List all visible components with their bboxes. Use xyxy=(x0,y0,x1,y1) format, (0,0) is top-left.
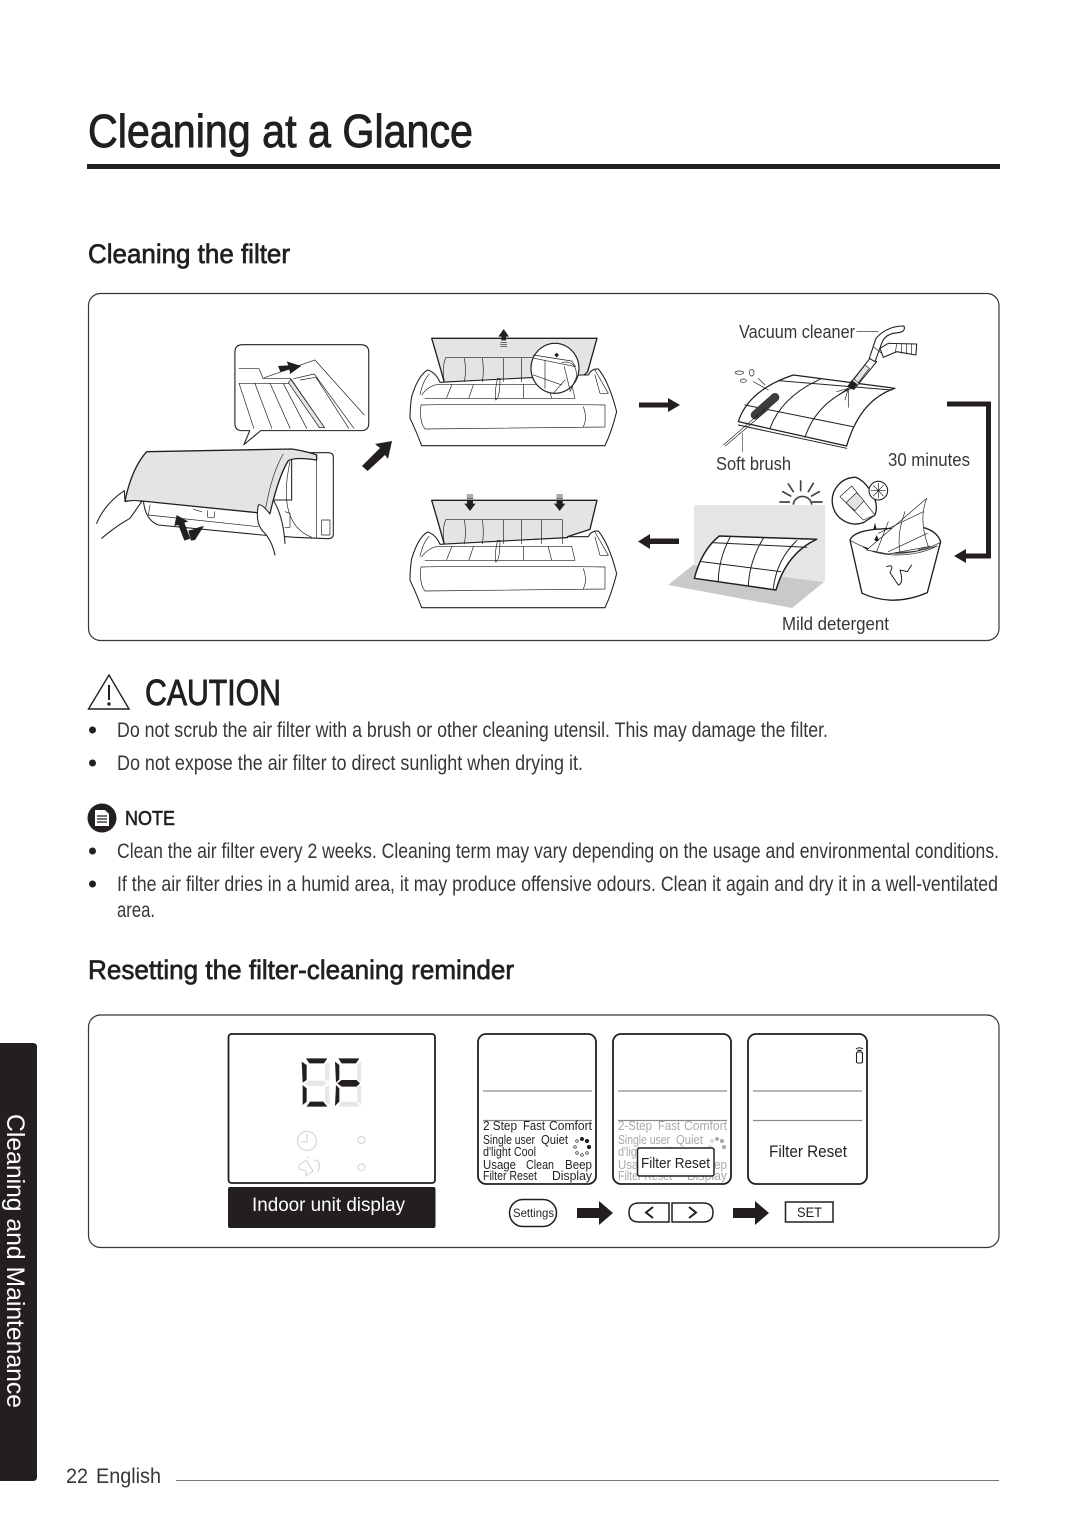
caution heading xyxy=(88,672,281,713)
arrow: left to reinsert xyxy=(638,534,679,549)
caution bullets: Do not expose the air filter to direct sunlight when drying it. xyxy=(117,752,583,775)
button: settings: Settings xyxy=(513,1206,554,1220)
remote screen 1: Beep xyxy=(565,1157,592,1172)
icon: warning triangle xyxy=(88,675,129,709)
note heading xyxy=(88,804,175,832)
illustration: reinserting the filter xyxy=(410,495,617,608)
buttons: left and right xyxy=(629,1203,713,1222)
remote screen 2: Usage xyxy=(618,1157,651,1172)
remote screen 2: Single user xyxy=(618,1132,671,1147)
remote screen 2: d'light Cool xyxy=(618,1144,671,1159)
remote screen 1: Single user xyxy=(483,1132,536,1147)
remote screen 1: Comfort xyxy=(549,1118,592,1133)
remote screen 1: Clean xyxy=(526,1157,554,1172)
vacuum nozzle xyxy=(848,358,877,389)
panel: filter cleaning steps xyxy=(88,294,999,640)
note bullets: area. xyxy=(117,899,155,922)
heading: resetting reminder: Resetting the filter-cleaning reminder xyxy=(88,955,514,985)
indoor unit display label xyxy=(228,1187,436,1228)
arrow: step to soak xyxy=(947,404,988,556)
label: 30 minutes: 30 minutes xyxy=(888,450,970,470)
remote screen 2: Fast xyxy=(658,1118,680,1133)
arrows: up and down xyxy=(174,515,190,541)
unit body xyxy=(143,453,333,539)
icon: remote signal xyxy=(856,1048,863,1063)
icon: sun xyxy=(694,481,822,590)
caution bullets: Do not scrub the air filter with a brush or other cleaning utensil. This may damage the filter. xyxy=(117,719,828,742)
icon: note xyxy=(88,804,116,832)
label: soft brush: Soft brush xyxy=(716,454,791,474)
side tab: section name xyxy=(0,1043,37,1481)
title: Cleaning at a Glance xyxy=(88,105,473,157)
illustration: soaking in mild detergent xyxy=(832,477,941,600)
remote screen 3 xyxy=(748,1034,867,1184)
button: set xyxy=(786,1202,833,1222)
remote screen 2: Beep xyxy=(700,1157,727,1172)
label: mild detergent: Mild detergent xyxy=(782,614,889,634)
caution bullets xyxy=(89,719,828,775)
note heading: NOTE xyxy=(125,808,175,830)
panel: reset reminder xyxy=(88,1015,999,1248)
remote screen 1: Display xyxy=(552,1168,592,1183)
arrow: right to vacuum xyxy=(639,398,680,412)
remote screen 1: Usage xyxy=(483,1157,516,1172)
illustration: opening the front panel xyxy=(97,449,333,555)
illustration: vacuum and brush cleaning xyxy=(723,326,917,452)
detergent bottle xyxy=(832,477,876,524)
remote screen 2 xyxy=(613,1034,731,1184)
remote screen 2: Quiet xyxy=(676,1132,703,1147)
footer: page number: English xyxy=(96,1465,161,1488)
illustration: drying in the shade xyxy=(668,481,825,608)
icon: loading ring xyxy=(574,1137,591,1156)
callout: filter tab detail xyxy=(235,345,369,445)
seven segment CF readout xyxy=(302,1058,361,1107)
remote screen 2: Comfort xyxy=(684,1118,727,1133)
button: set: SET xyxy=(797,1204,822,1220)
heading: cleaning the filter: Cleaning the filter xyxy=(88,239,290,269)
arrow: settings to navigation xyxy=(577,1201,613,1225)
note bullets xyxy=(89,840,999,922)
soft brush xyxy=(755,397,775,415)
arrow: diagonal step 1 xyxy=(362,441,392,471)
illustration: removing the filter xyxy=(410,329,617,446)
arrow: navigation to set xyxy=(733,1201,769,1225)
footer: page number xyxy=(66,1465,161,1488)
indoor unit display xyxy=(228,1034,435,1183)
remote screen 3: Filter Reset xyxy=(769,1142,847,1161)
lid xyxy=(125,449,317,514)
remote screen 1: Fast xyxy=(523,1118,545,1133)
status icons xyxy=(298,1132,365,1176)
filter sheet xyxy=(738,375,895,446)
hands xyxy=(97,491,142,538)
side tab: section name: Cleaning and Maintenance xyxy=(1,1114,29,1408)
remote screen 2: Filter Reset xyxy=(618,1168,672,1183)
button: settings xyxy=(510,1200,556,1226)
indoor unit display label: Indoor unit display xyxy=(252,1195,405,1216)
remote screen 1 xyxy=(478,1034,596,1184)
remote screen 1: Quiet xyxy=(541,1132,568,1147)
caution heading: CAUTION xyxy=(145,672,281,713)
popup: filter reset: Filter Reset xyxy=(641,1155,711,1172)
remote screen 1: Filter Reset xyxy=(483,1168,537,1183)
remote screen 2: 2-Step xyxy=(618,1118,652,1133)
remote screen 1: 2 Step xyxy=(483,1118,517,1133)
remote screen 2: Display xyxy=(687,1168,727,1183)
remote screen 1: d'light Cool xyxy=(483,1144,536,1159)
popup: filter reset xyxy=(638,1148,714,1176)
footer: page number: 22 xyxy=(66,1465,88,1488)
label: vacuum cleaner: Vacuum cleaner xyxy=(739,322,855,342)
